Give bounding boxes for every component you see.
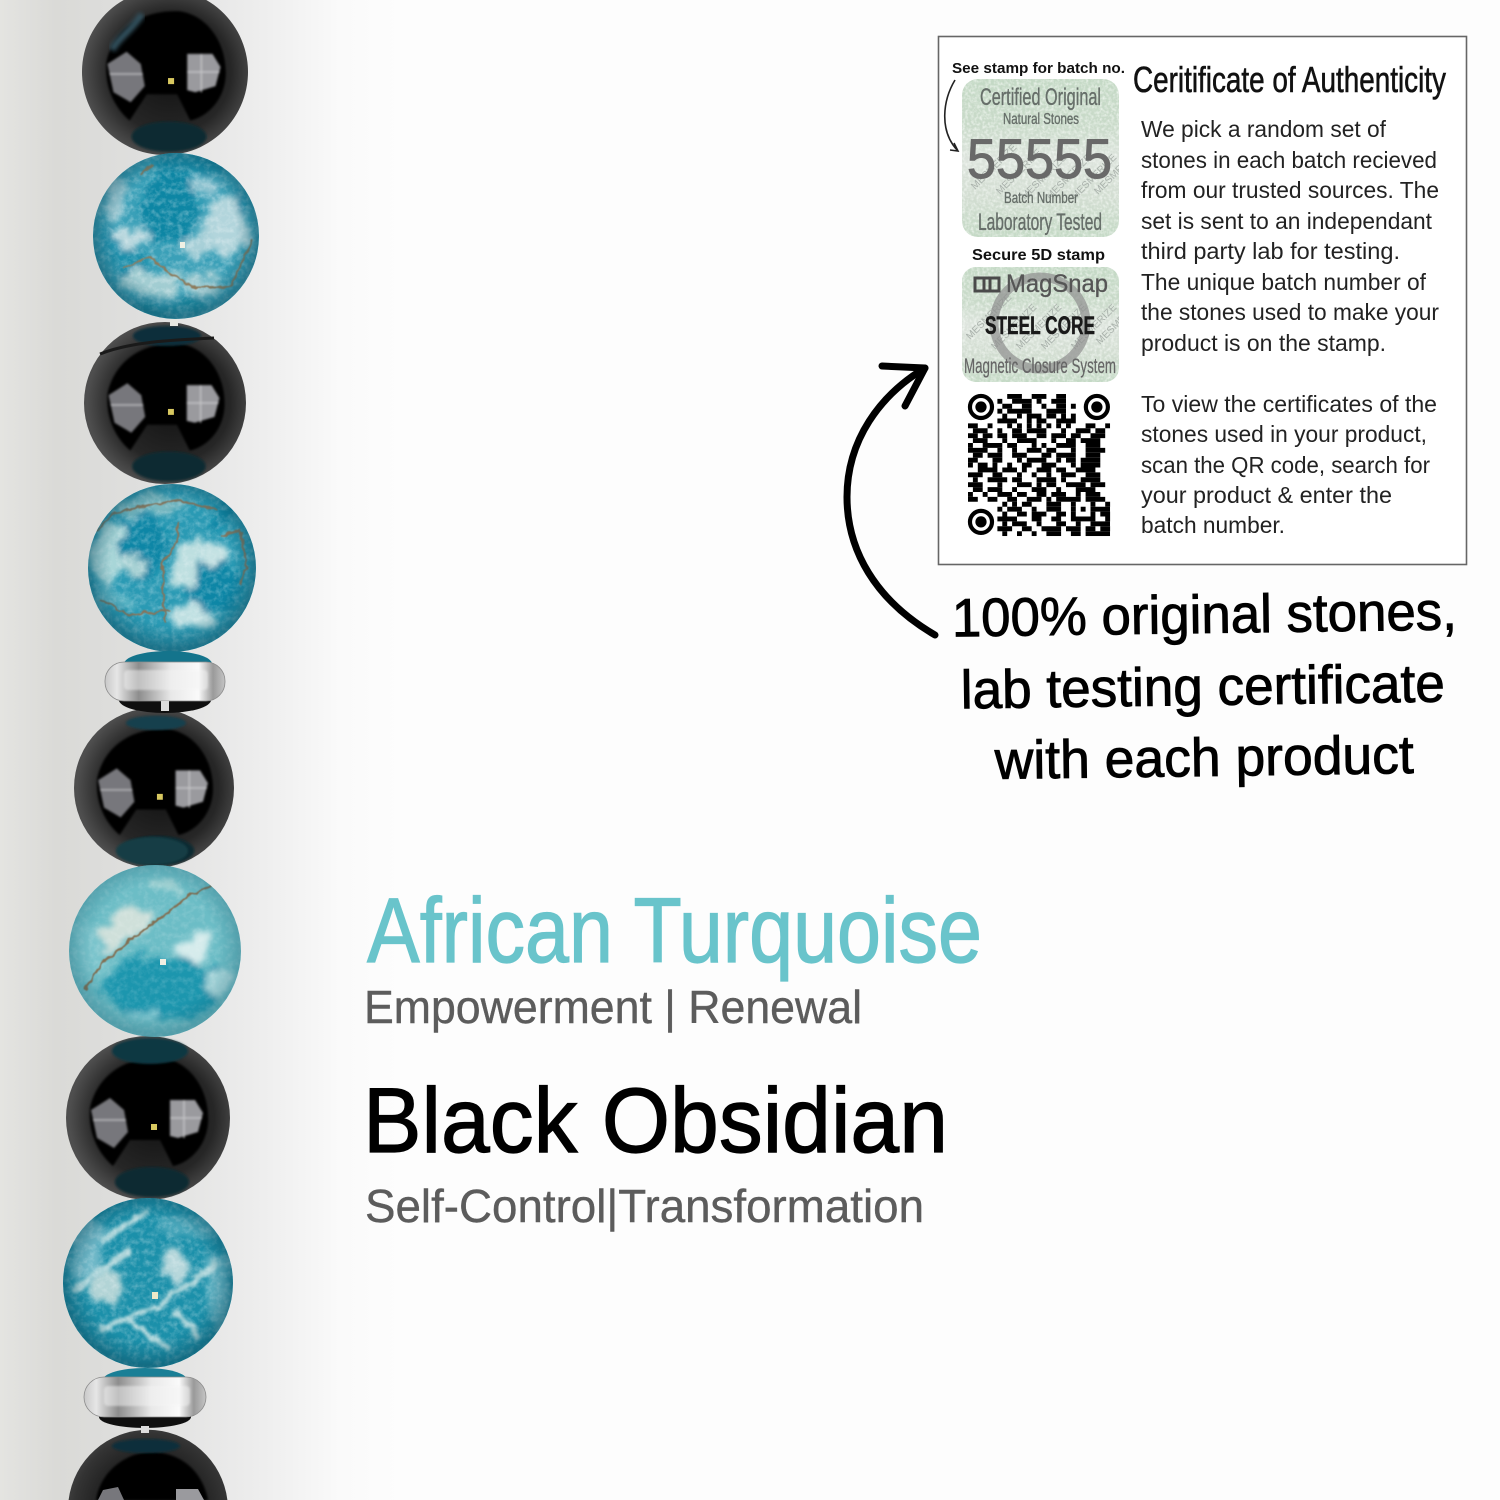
batch stamp: MESMERIZE xyxy=(1069,152,1119,202)
certificate body paragraph 1: set is sent to an independant xyxy=(1141,208,1433,234)
magsnap stamp: MagSnap xyxy=(1006,270,1108,298)
icon: small curved arrow xyxy=(945,80,958,151)
background shadow xyxy=(0,0,400,1500)
black obsidian bead 3 xyxy=(74,708,234,868)
label: secure stamp: Secure 5D stamp xyxy=(972,247,1105,264)
batch stamp: Laboratory Tested xyxy=(978,209,1102,236)
black obsidian bead 1 xyxy=(82,0,248,155)
batch stamp: Natural Stones xyxy=(1003,111,1079,128)
qr finders xyxy=(970,396,1108,533)
callout: original stones xyxy=(951,581,1457,791)
certificate body paragraph 2: your product & enter the xyxy=(1141,482,1392,508)
magsnap stamp: Magnetic Closure System xyxy=(964,355,1116,378)
turquoise bead 1 xyxy=(90,150,262,322)
subheading: obsidian properties: Self-Control|Transformation xyxy=(365,1180,924,1232)
certificate body paragraph 2: scan the QR code, search for xyxy=(1141,452,1430,478)
black obsidian bead 4 xyxy=(66,1036,230,1200)
heading: Black Obsidian: Black Obsidian xyxy=(363,1070,948,1172)
thread between beads xyxy=(170,314,178,326)
batch stamp: Batch Number xyxy=(1004,190,1078,207)
heading: African Turquoise: African Turquoise xyxy=(367,880,982,982)
qr code xyxy=(968,396,1115,534)
magsnap stamp: MESMERIZE xyxy=(1039,302,1089,352)
certificate body paragraph 1: third party lab for testing. xyxy=(1141,238,1400,264)
certificate body paragraph 1: the stones used to make your xyxy=(1141,299,1439,325)
certificate body paragraph 2: To view the certificates of the xyxy=(1141,391,1437,417)
callout: original stones: with each product xyxy=(993,725,1414,791)
black bead lip xyxy=(100,338,214,354)
batch stamp xyxy=(962,79,1119,237)
magsnap stamp: MESMERIZE xyxy=(989,302,1039,352)
card frame xyxy=(938,36,1466,564)
magsnap stamp: MESMERIZE xyxy=(1014,302,1064,352)
certificate body paragraph 2: batch number. xyxy=(1141,512,1285,538)
black obsidian bead 2 xyxy=(84,322,246,484)
label: see stamp: See stamp for batch no. xyxy=(952,61,1125,77)
batch stamp: 55555 xyxy=(967,127,1112,190)
magsnap stamp: MESMERIZE xyxy=(1069,302,1119,352)
certificate body paragraph 1: We pick a random set of xyxy=(1141,116,1387,142)
certificate body paragraph 1: product is on the stamp. xyxy=(1141,330,1386,356)
arrow: large curved arrow to certificate xyxy=(847,366,935,635)
batch stamp: MESMERIZE xyxy=(994,147,1044,197)
bead strand xyxy=(60,0,262,1500)
certificate card xyxy=(938,36,1466,564)
batch stamp: MESMERIZE xyxy=(969,142,1019,192)
subheading: turquoise properties: Empowerment | Renewal xyxy=(364,981,862,1033)
certificate body paragraph 2: stones used in your product, xyxy=(1141,421,1427,447)
turquoise bead 4 xyxy=(60,1196,236,1370)
certificate body paragraph 1: stones in each batch recieved xyxy=(1141,147,1437,173)
batch stamp: MESMERIZE xyxy=(1092,147,1142,197)
certificate body paragraph 1: from our trusted sources. The xyxy=(1141,177,1439,203)
callout: original stones: lab testing certificate xyxy=(960,654,1445,720)
magsnap stamp: MESMERIZE xyxy=(964,292,1014,342)
certificate body paragraph 1: The unique batch number of xyxy=(1141,269,1427,295)
batch stamp: Certified Original xyxy=(980,84,1101,111)
black obsidian bead 5 xyxy=(69,1430,227,1500)
silver spacer 1 xyxy=(105,651,225,713)
certificate body paragraph 2 xyxy=(1141,391,1437,538)
magsnap stamp: MESMERIZE xyxy=(1094,297,1144,347)
batch stamp: MESMERIZE xyxy=(1044,152,1094,202)
turquoise bead 3 xyxy=(66,864,244,1040)
magsnap stamp xyxy=(962,267,1119,382)
turquoise bead 2 xyxy=(85,482,259,654)
callout: original stones: 100% original stones, xyxy=(951,581,1457,649)
batch stamp: MESMERIZE xyxy=(1019,152,1069,202)
silver spacer 2 xyxy=(84,1368,206,1433)
certificate body paragraph 1 xyxy=(1141,116,1439,356)
magsnap stamp: STEEL CORE xyxy=(985,312,1095,340)
